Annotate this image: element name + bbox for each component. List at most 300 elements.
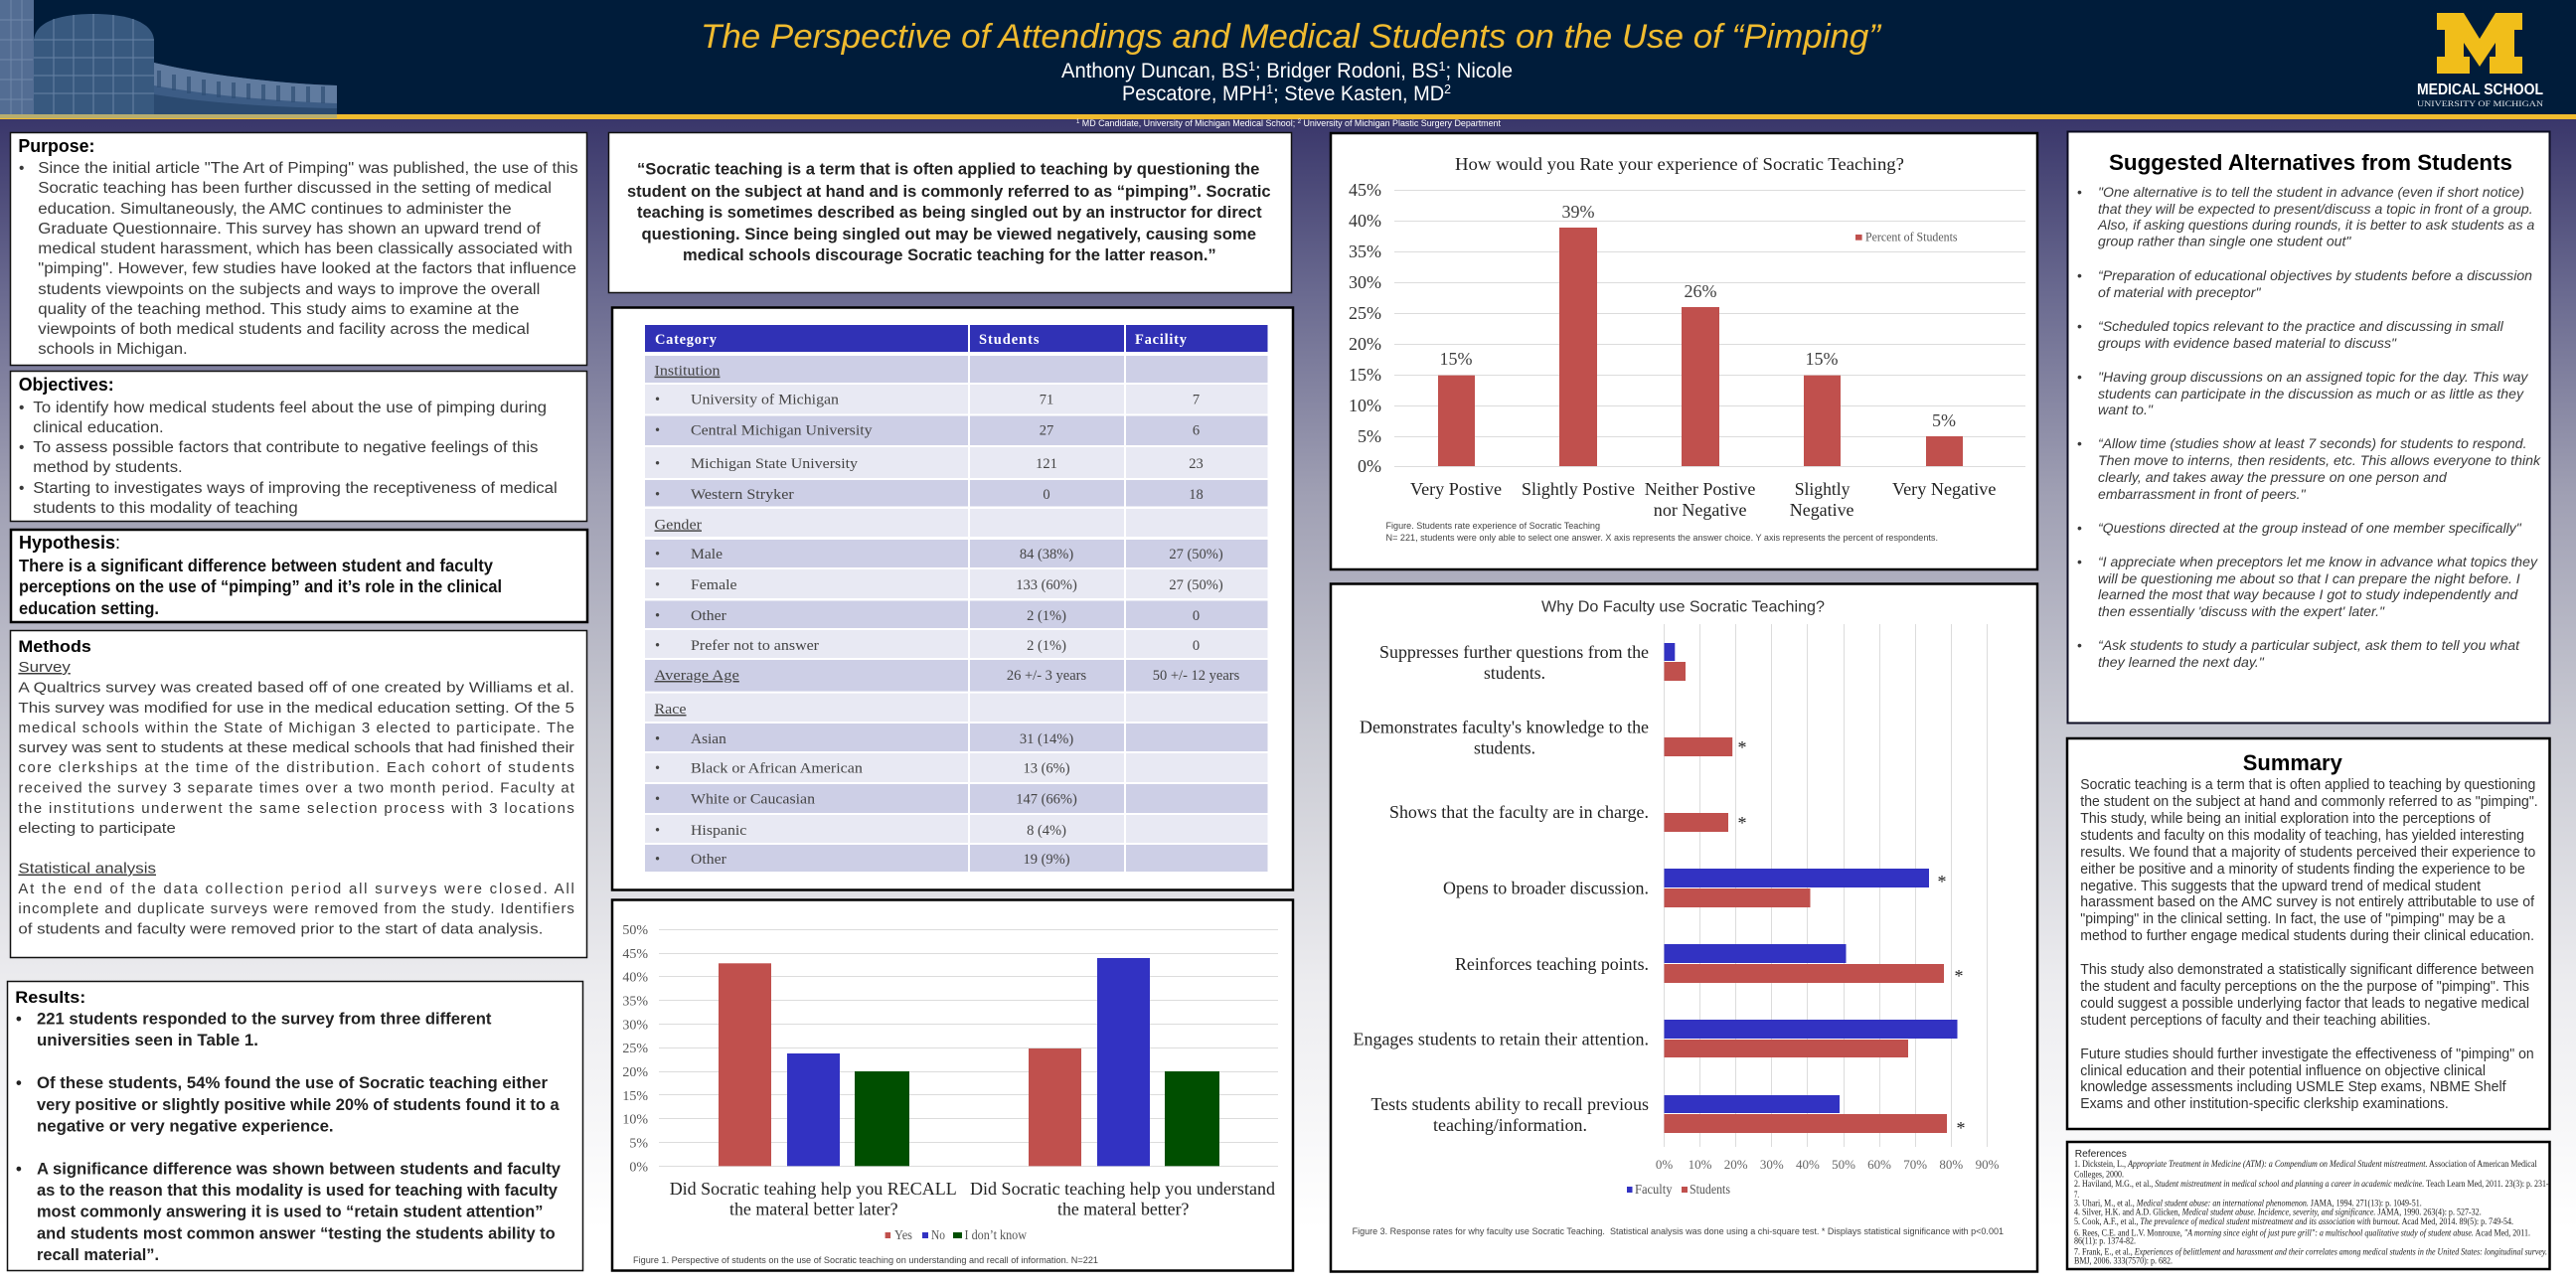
- panel: references: [2067, 1142, 2550, 1269]
- reference list: 5. Cook, A.F., et al., The prevalence of medical student mistreatment and its association with burnout. Acad Med, 2014. 89(5): p. 749-54.: [2074, 1216, 2513, 1227]
- alternatives list: [2077, 184, 2541, 670]
- table rows: institution: 18: [1189, 487, 1204, 503]
- alternatives list: Then move to interns, then residents, etc. This allows everyone to think: [2098, 452, 2541, 468]
- objectives list: •: [19, 439, 24, 456]
- methods: survey text: This survey was modified for use in the medical education setting. Of the 5: [18, 700, 574, 717]
- table rows: race: 19 (9%): [1023, 852, 1070, 868]
- data labels: 26%: [1684, 281, 1717, 301]
- title: The Perspective of Attendings and Medical Students on the Use of “Pimping”: [701, 18, 1882, 56]
- table rows: race: Black or African American: [691, 761, 864, 777]
- legend: yes no i don't know: I don’t know: [964, 1228, 1028, 1243]
- objectives list: Starting to investigates ways of improving the receptiveness of medical: [33, 480, 558, 497]
- authors: ; Steve Kasten, MD: [1273, 82, 1444, 105]
- chart axis: percent scale: 25%: [622, 1042, 648, 1056]
- chart axis: percent scale: 40%: [1349, 211, 1381, 231]
- summary text: This study also demonstrated a statistically significant difference between: [2080, 962, 2534, 978]
- alternatives list: clearly, and takes away the pressure on one person and: [2098, 469, 2448, 485]
- table rows: gender: Prefer not to answer: [691, 638, 819, 654]
- table rows: gender: •: [655, 577, 660, 593]
- reference list: 6. Rees, C.E. and L.V. Monrouxe, "A morning since eight of just pure grill": a multischool qualitative study of student abuse. Acad Med, 2011.: [2074, 1227, 2530, 1238]
- chart axis: percent scale: 5%: [629, 1137, 648, 1151]
- alternatives list: students can participate in the discussion as much or as little as they: [2098, 386, 2524, 402]
- table rows: gender: 27 (50%): [1169, 547, 1223, 563]
- panel: objectives: [10, 372, 586, 521]
- table rows: race: •: [655, 823, 660, 839]
- results list: 221 students responded to the survey from three different: [37, 1010, 492, 1028]
- table rows: institution: •: [655, 422, 660, 438]
- chart title: Why Do Faculty use Socratic Teaching?: [1541, 599, 1825, 616]
- heading: purpose: Purpose:: [18, 136, 94, 156]
- table rows: institution: •: [655, 393, 660, 408]
- results list: as to the reason that this modality is used for teaching with faculty: [37, 1182, 559, 1200]
- heading: methods: Methods: [18, 637, 91, 656]
- summary text: Socratic teaching is a term that is often applied to teaching by questioning: [2080, 777, 2535, 793]
- category labels: Opens to broader discussion.: [1443, 879, 1649, 898]
- table rows: race: Asian: [691, 731, 727, 747]
- heading: references: References: [2075, 1148, 2127, 1160]
- bar chart: faculty vs students reasons: [1354, 624, 2000, 1198]
- data labels: [1439, 202, 1956, 430]
- category labels: Negative: [1790, 500, 1854, 520]
- alternatives list: •: [2077, 369, 2082, 385]
- alternatives list: •: [2077, 435, 2082, 451]
- results list: negative or very negative experience.: [37, 1117, 334, 1135]
- authors: ; Nicole: [1445, 60, 1513, 82]
- logo: University of Michigan Medical School: MEDICAL SCHOOL: [2417, 81, 2543, 98]
- table rows: race: •: [655, 761, 660, 777]
- table rows: gender: 133 (60%): [1016, 577, 1077, 593]
- significance markers: *: [1954, 966, 1964, 986]
- results list: most commonly answering it is used to “retain student attention”: [37, 1204, 543, 1221]
- summary text: negative. This suggests that the upward trend of medical student: [2080, 879, 2481, 894]
- methods: survey text: core clerkships at the time of the distribution. Each cohort of students: [18, 759, 574, 776]
- table rows: institution: 121: [1036, 456, 1057, 472]
- reference list: 86(11): p. 1374-82.: [2074, 1235, 2136, 1246]
- methods: statistical analysis text: Statistical analysis: [18, 861, 156, 878]
- data labels: 5%: [1932, 410, 1956, 430]
- heading: hypothesis: Hypothesis:: [19, 533, 120, 553]
- alternatives list: Also, if asking questions during rounds, it is better to ask students as a: [2097, 217, 2535, 233]
- table header row: [645, 325, 1268, 352]
- panel: figure 1 recall and understanding: [612, 900, 1293, 1270]
- table rows: gender: •: [655, 638, 660, 654]
- significance markers: *: [1737, 737, 1747, 757]
- summary text: Exams and other institution-specific clerkship examinations.: [2080, 1096, 2449, 1112]
- purpose text: students viewpoints on the subjects and ways to improve the overall: [38, 281, 540, 298]
- bars: recall question: [719, 963, 909, 1166]
- table rows: race: 147 (66%): [1016, 792, 1077, 808]
- objectives list: To identify how medical students feel about the use of pimping during: [33, 400, 547, 416]
- reference list: 1. Dickstein, L., Appropriate Treatment in Medicine (ATM): a Compendium on Medical Student mistreatment. Association of American Medical: [2074, 1159, 2537, 1170]
- methods: survey text: electing to participate: [18, 820, 176, 837]
- table rows: race: Hispanic: [691, 823, 746, 839]
- chart axis: percent scale: 60%: [1867, 1157, 1891, 1172]
- affiliations: University of Michigan Plastic Surgery Department: [1301, 118, 1501, 128]
- table rows: race: Race: [654, 702, 686, 718]
- legend: percent of students: Percent of Students: [1865, 230, 1958, 244]
- reference list: 4. Silver, H.K. and A.D. Glicken, Medical student abuse. Incidence, severity, and significance. JAMA, 1990. 263(4): p. 527-32.: [2074, 1208, 2482, 1218]
- legend: faculty and students: Faculty: [1635, 1183, 1672, 1198]
- table rows: gender: 27 (50%): [1169, 577, 1223, 593]
- summary text: method to further engage medical students during their clinical education.: [2080, 928, 2534, 944]
- objectives list: method by students.: [33, 459, 183, 476]
- hypothesis statement: education setting.: [19, 598, 159, 618]
- purpose text: Socratic teaching has been further discussed in the setting of medical: [38, 180, 552, 197]
- results list: •: [16, 1010, 22, 1028]
- methods: survey text: A Qualtrics survey was created based off of one created by Williams et al.: [18, 680, 574, 697]
- summary text: student perceptions of faculty and their teaching abilities.: [2080, 1013, 2431, 1029]
- objectives list: To assess possible factors that contribute to negative feelings of this: [33, 439, 539, 456]
- alternatives list: "Having group discussions on an assigned topic for the day. This way: [2098, 369, 2528, 385]
- table rows: institution: 7: [1193, 393, 1200, 408]
- table rows: institution: Central Michigan University: [691, 422, 873, 438]
- purpose text: schools in Michigan.: [38, 341, 188, 358]
- purpose text: "pimping". However, few studies have looked at the factors that influence: [38, 260, 576, 277]
- panel: results: [8, 982, 582, 1270]
- heading: objectives: Objectives:: [19, 375, 114, 395]
- axis label: recall question: Did Socratic teahing help you RECALL: [670, 1179, 957, 1199]
- icon: hospital building: [0, 0, 337, 118]
- category labels: nor Negative: [1654, 500, 1747, 520]
- reference list: [2074, 1159, 2549, 1267]
- caption: figure 1: Figure 1. Perspective of students on the use of Socratic teaching on understanding and recall of information. N=221: [633, 1255, 1098, 1265]
- table rows: race: White or Caucasian: [691, 792, 816, 808]
- chart axis: percent scale: [1656, 1157, 2000, 1172]
- table rows: race: •: [655, 731, 660, 747]
- alternatives list: •: [2077, 520, 2082, 536]
- panel: definition quote: [608, 133, 1292, 292]
- category labels: Engages students to retain their attention.: [1354, 1030, 1649, 1049]
- bars: faculty: [1664, 643, 1958, 1113]
- legend: yes no i don't know: No: [931, 1228, 945, 1243]
- summary text: students and faculty on this modality of teaching, has yielded interesting: [2080, 828, 2524, 844]
- table header row: Students: [979, 332, 1040, 348]
- methods: survey text: survey was sent to students at these medical schools that had finished their: [18, 739, 574, 756]
- caption: rating figure: [1385, 521, 1938, 543]
- alternatives list: will be questioning me about so that I can prepare the night before. I: [2098, 570, 2520, 586]
- authors: 1: [1248, 59, 1255, 74]
- data labels: 39%: [1562, 202, 1594, 222]
- table header row: Facility: [1135, 332, 1188, 348]
- table rows: institution: 0: [1043, 487, 1050, 503]
- purpose text: viewpoints of both medical students and facility across the medical: [38, 321, 530, 338]
- purpose text: Graduate Questionnaire. This survey has shown an upward trend of: [38, 221, 542, 238]
- results list: •: [16, 1074, 22, 1092]
- summary text: knowledge assessments including USMLE Step exams, NBME Shelf: [2080, 1079, 2506, 1095]
- objectives list: [19, 400, 558, 517]
- table rows: gender: Female: [691, 577, 737, 593]
- logo: University of Michigan Medical School: [2417, 13, 2543, 108]
- alternatives list: •: [2077, 184, 2082, 200]
- table rows: gender: 2 (1%): [1027, 638, 1066, 654]
- quote text: medical schools discourage Socratic teaching for the latter reason.”: [683, 245, 1216, 264]
- legend: yes no i don't know: Yes: [894, 1228, 912, 1243]
- summary text: harassment based on the AMC survey is not entirely attributable to use of: [2080, 894, 2535, 910]
- table row: average age: [645, 660, 1268, 692]
- methods: statistical analysis text: of students and faculty were removed prior to the start of data analysis.: [18, 920, 543, 937]
- alternatives list: •: [2077, 267, 2082, 283]
- chart axis: percent scale: 45%: [622, 947, 648, 962]
- summary text: Future studies should further investigate the effectiveness of "pimping" on: [2080, 1046, 2534, 1062]
- table rows: gender: 0: [1193, 608, 1200, 624]
- quote text: [627, 160, 1271, 264]
- category labels: students.: [1474, 737, 1535, 757]
- chart axis: percent scale: 5%: [1358, 426, 1381, 446]
- results list: universities seen in Table 1.: [37, 1032, 258, 1049]
- purpose text: education. Simultaneously, the AMC continues to administer the: [38, 201, 512, 218]
- table rows: institution: 71: [1040, 393, 1053, 408]
- table rows: institution: 6: [1193, 422, 1200, 438]
- authors: [1061, 59, 1513, 105]
- summary text: This study, while being an initial exploration into the perceptions of: [2080, 811, 2492, 827]
- category labels: [1410, 479, 1996, 520]
- significance markers: *: [1737, 813, 1747, 833]
- authors: Pescatore, MPH: [1122, 82, 1274, 105]
- hypothesis statement: There is a significant difference between student and faculty: [19, 556, 493, 575]
- methods: statistical analysis text: At the end of the data collection period all surveys were closed. All: [18, 881, 574, 897]
- results list: •: [16, 1161, 22, 1179]
- header banner: [0, 0, 2576, 128]
- purpose text: Since the initial article "The Art of Pimping" was published, the use of this: [38, 160, 578, 177]
- category labels: teaching/information.: [1433, 1115, 1587, 1135]
- category labels: Demonstrates faculty's knowledge to the: [1360, 718, 1649, 737]
- chart axis: percent scale: 10%: [1349, 396, 1381, 415]
- table rows: race: Other: [691, 852, 726, 868]
- caption: rating figure: Figure. Students rate experience of Socratic Teaching: [1385, 521, 1600, 531]
- alternatives list: learned the most that way because I got to study independently and: [2098, 586, 2519, 602]
- legend: faculty and students: [1627, 1183, 1730, 1198]
- alternatives list: “Allow time (studies show at least 7 seconds) for students to respond.: [2098, 435, 2526, 451]
- summary text: could suggest a possible underlying factor that leads to negative medical: [2080, 996, 2529, 1012]
- table rows: institution: 27: [1040, 422, 1053, 438]
- category labels: Tests students ability to recall previous: [1371, 1094, 1649, 1114]
- chart axis: percent scale: [622, 923, 648, 1175]
- table rows: institution: Institution: [654, 364, 721, 380]
- alternatives list: of material with preceptor": [2098, 284, 2262, 300]
- affiliations: 1: [1076, 119, 1080, 125]
- bars: understanding question: [1029, 958, 1219, 1166]
- reference list: BMJ, 2006. 333(7570): p. 682.: [2074, 1256, 2173, 1267]
- authors: 1: [1439, 59, 1445, 74]
- category labels: Reinforces teaching points.: [1455, 954, 1649, 974]
- chart axis: percent scale: 80%: [1939, 1157, 1963, 1172]
- panel: methods: [10, 630, 586, 958]
- axis label: understanding question: the materal better?: [1057, 1200, 1189, 1219]
- chart axis: percent scale: 10%: [1689, 1157, 1712, 1172]
- methods: survey text: Survey: [18, 659, 71, 676]
- bars: students: [1664, 662, 1947, 1133]
- alternatives list: “Scheduled topics relevant to the practice and discussing in small: [2098, 318, 2504, 334]
- chart axis: percent scale: 0%: [1358, 456, 1381, 476]
- chart axis: percent scale: 40%: [622, 971, 648, 986]
- reference list: 2. Haviland, M.G., et al., Student mistreatment in medical school and planning a career in academic medicine. Teach Learn Med, 2011. 23(3): p. 231-: [2074, 1179, 2549, 1190]
- chart axis: percent scale: 40%: [1796, 1157, 1820, 1172]
- objectives list: students to this modality of teaching: [33, 500, 298, 517]
- significance markers: *: [1938, 872, 1946, 891]
- table rows: institution: Michigan State University: [691, 456, 859, 472]
- table header row: Category: [655, 332, 718, 348]
- bar chart: experience rating: [1349, 180, 2025, 520]
- purpose text: [19, 160, 578, 358]
- bars: percent of students: [1438, 228, 1963, 466]
- legend: yes no i don't know: [886, 1228, 1028, 1243]
- table rows: institution: •: [655, 487, 660, 503]
- chart axis: percent scale: 30%: [622, 1018, 648, 1033]
- chart axis: percent scale: 25%: [1349, 303, 1381, 323]
- category labels: Slightly: [1795, 479, 1851, 499]
- alternatives list: group rather than single one student out": [2098, 233, 2351, 248]
- chart title: How would you Rate your experience of Socratic Teaching?: [1455, 154, 1904, 174]
- table rows: gender: •: [655, 608, 660, 624]
- summary text: "pimping" in the clinical setting. In fact, the use of "pimping" may be a: [2080, 911, 2506, 927]
- methods: survey text: medical schools within the State of Michigan 3 elected to participate. The: [18, 720, 574, 736]
- heading: results: Results:: [15, 988, 85, 1007]
- summary text: clinical education and their potential influence on objective clinical: [2080, 1063, 2486, 1079]
- heading: suggested alternatives: Suggested Alternatives from Students: [2109, 150, 2512, 175]
- chart axis: percent scale: 0%: [629, 1160, 648, 1175]
- methods: statistical analysis text: [18, 861, 574, 937]
- results list: recall material”.: [37, 1246, 159, 1264]
- authors: 2: [1444, 81, 1451, 96]
- purpose text: medical student harassment, which has been classically associated with: [38, 241, 572, 257]
- authors: ; Bridger Rodoni, BS: [1255, 60, 1439, 82]
- methods: statistical analysis text: incomplete and duplicate surveys were removed from the study. Identifiers: [18, 900, 574, 917]
- axis label: understanding question: Did Socratic teaching help you understand: [970, 1179, 1275, 1199]
- table rows: gender: 2 (1%): [1027, 608, 1066, 624]
- chart axis: percent scale: 20%: [622, 1065, 648, 1080]
- significance markers: *: [1956, 1118, 1966, 1138]
- bar chart: recall and understanding: [622, 923, 1278, 1243]
- chart axis: percent scale: 10%: [622, 1113, 648, 1128]
- table rows: institution: University of Michigan: [691, 393, 840, 408]
- category labels: Very Postive: [1410, 479, 1502, 499]
- table rows: institution: 23: [1189, 456, 1204, 472]
- axis label: recall question: the materal better later?: [729, 1200, 898, 1219]
- table rows: gender: 84 (38%): [1020, 547, 1073, 563]
- panel: summary: [2067, 738, 2550, 1129]
- reference list: 3. Uhari, M., et al., Medical student abuse: an international phenomenon. JAMA, 1994. 271(13): p. 1049-51.: [2074, 1198, 2422, 1208]
- category labels: Suppresses further questions from the: [1379, 642, 1649, 662]
- axis label: understanding question: [970, 1179, 1275, 1219]
- chart axis: percent scale: 70%: [1903, 1157, 1927, 1172]
- chart axis: percent scale: 45%: [1349, 180, 1381, 200]
- table: demographics: [645, 325, 1268, 872]
- table rows: institution: •: [655, 456, 660, 472]
- table rows: gender: [645, 509, 1268, 658]
- table rows: gender: Male: [691, 547, 723, 563]
- category labels: Neither Postive: [1645, 479, 1755, 499]
- category labels: [1354, 642, 1649, 1135]
- category labels: Shows that the faculty are in charge.: [1389, 802, 1649, 822]
- table rows: race: 31 (14%): [1020, 731, 1073, 747]
- panel: demographics table: [612, 308, 1293, 890]
- chart axis: percent scale: 30%: [1760, 1157, 1784, 1172]
- summary text: the student on the subject at hand and commonly referred to as "pimping".: [2080, 794, 2538, 810]
- alternatives list: •: [2077, 318, 2082, 334]
- table rows: gender: 0: [1193, 638, 1200, 654]
- alternatives list: "One alternative is to tell the student in advance (even if short notice): [2098, 184, 2524, 200]
- reference list: 7.: [2074, 1191, 2079, 1201]
- hypothesis statement: [19, 556, 502, 618]
- chart axis: percent scale: 35%: [1349, 242, 1381, 261]
- quote text: questioning. Since being singled out may be viewed negatively, causing some: [642, 225, 1256, 243]
- results list: Of these students, 54% found the use of Socratic teaching either: [37, 1074, 549, 1092]
- purpose text: quality of the teaching method. This study aims to examine at the: [38, 301, 519, 318]
- table rows: gender: Other: [691, 608, 726, 624]
- alternatives list: embarrassment in front of peers.": [2098, 486, 2307, 502]
- table rows: race: 13 (6%): [1023, 761, 1070, 777]
- results list: and students most common answer “testing the students ability to: [37, 1224, 556, 1242]
- quote text: teaching is sometimes described as being singled out by an instructor for direct: [637, 203, 1262, 222]
- table row: average age: Average Age: [654, 668, 739, 684]
- alternatives list: “Preparation of educational objectives by students before a discussion: [2098, 267, 2532, 283]
- objectives list: •: [19, 400, 24, 416]
- chart axis: percent scale: [1349, 180, 1381, 476]
- alternatives list: •: [2077, 554, 2082, 569]
- chart axis: percent scale: 90%: [1976, 1157, 2000, 1172]
- alternatives list: •: [2077, 637, 2082, 653]
- table rows: race: 8 (4%): [1027, 823, 1066, 839]
- reference list: Colleges, 2000.: [2074, 1171, 2124, 1181]
- alternatives list: “I appreciate when preceptors let me know in advance what topics they: [2098, 554, 2538, 569]
- table rows: gender: Gender: [654, 517, 702, 533]
- panel: hypothesis: [11, 530, 587, 622]
- chart axis: percent scale: 50%: [622, 923, 648, 938]
- panel: why faculty use socratic teaching: [1331, 584, 2037, 1272]
- summary text: either be positive and a minority of students finding the experience to be: [2080, 862, 2525, 878]
- axis label: recall question: [670, 1179, 957, 1219]
- table rows: race: •: [655, 792, 660, 808]
- methods: survey text: [18, 659, 575, 837]
- alternatives list: want to.": [2098, 402, 2154, 417]
- summary text: the student and faculty perceptions on the the purpose of "pimping". This: [2080, 979, 2529, 995]
- chart axis: percent scale: 0%: [1656, 1157, 1673, 1172]
- significance markers: [1737, 737, 1966, 1138]
- methods: survey text: the institutions underwent the same selection process with 3 locations: [18, 800, 574, 817]
- chart axis: percent scale: 20%: [1724, 1157, 1748, 1172]
- logo: University of Michigan Medical School: UNIVERSITY OF MICHIGAN: [2417, 99, 2543, 108]
- panel: suggested alternatives from students: [2067, 131, 2550, 724]
- alternatives list: then essentially 'discuss with the expert' later.": [2098, 603, 2385, 619]
- purpose text: •: [19, 160, 24, 177]
- quote text: student on the subject at hand and is commonly referred to as “pimping”. Socratic: [627, 182, 1271, 201]
- legend: faculty and students: Students: [1690, 1183, 1730, 1198]
- results list: very positive or slightly positive while 20% of students found it to a: [37, 1096, 560, 1114]
- objectives list: clinical education.: [33, 419, 164, 436]
- chart axis: percent scale: 50%: [1832, 1157, 1855, 1172]
- alternatives list: “Questions directed at the group instead of one member specifically": [2098, 520, 2522, 536]
- caption: rating figure: N= 221, students were only able to select one answer. X axis represents the answer choice. Y axis represents the percent of respondents.: [1385, 533, 1938, 543]
- table rows: institution: [645, 356, 1268, 507]
- summary text: results. We found that a majority of students perceived their experience to: [2080, 845, 2535, 861]
- alternatives list: groups with evidence based material to discuss": [2098, 335, 2397, 351]
- category labels: Very Negative: [1892, 479, 1996, 499]
- heading: summary: Summary: [2243, 750, 2343, 775]
- results list: [16, 1010, 562, 1264]
- table rows: race: •: [655, 852, 660, 868]
- caption: figure 3: Figure 3. Response rates for why faculty use Socratic Teaching. Statistical analysis was done using a chi-square test. * Displays statistical significance with p<0.001: [1353, 1226, 2004, 1236]
- authors: Anthony Duncan, BS: [1061, 60, 1255, 82]
- table row: average age: 50 +/- 12 years: [1153, 668, 1240, 684]
- affiliations: 2: [1298, 119, 1302, 125]
- objectives list: •: [19, 480, 24, 497]
- chart axis: percent scale: 30%: [1349, 272, 1381, 292]
- alternatives list: that they will be expected to present/discuss a topic in front of a group.: [2098, 201, 2533, 217]
- data labels: 15%: [1439, 349, 1473, 369]
- chart axis: percent scale: 15%: [622, 1089, 648, 1104]
- alternatives list: they learned the next day.": [2098, 654, 2265, 670]
- results list: A significance difference was shown between students and faculty: [37, 1161, 562, 1179]
